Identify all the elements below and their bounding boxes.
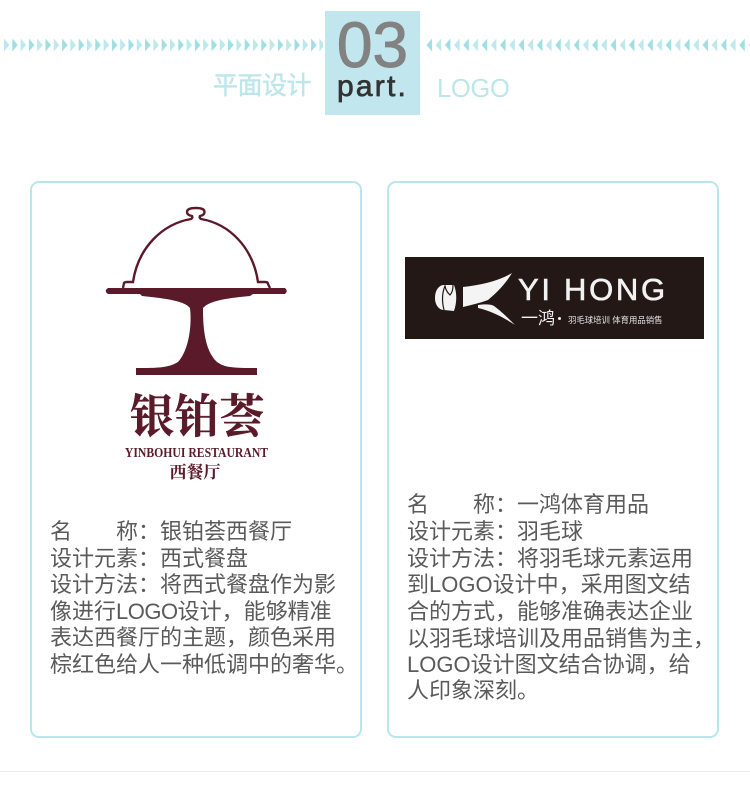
text block: Yi Hong description: 名 称：一鸿体育用品	[407, 492, 649, 517]
number badge	[325, 11, 420, 115]
text block: Yi Hong description: 合的方式，能够准确表达企业	[407, 599, 693, 624]
logo subtitle: 西餐厅	[170, 463, 220, 482]
number 03: 03	[337, 9, 408, 81]
logo english name: YINBOHUI RESTAURANT	[125, 445, 268, 460]
text block: restaurant description: 名 称：银铂荟西餐厅	[50, 519, 292, 544]
logo tagline: 羽毛球培训 体育用品销售	[568, 315, 662, 325]
logo chinese name: 一鸿	[521, 309, 555, 328]
text block: restaurant description: 像进行LOGO设计，能够精准	[50, 599, 332, 624]
text block: Yi Hong description: 设计方法：将羽毛球元素运用	[407, 546, 693, 571]
icon: plate and stand	[106, 288, 287, 375]
logo: restaurant cloche	[106, 206, 287, 375]
text block: Yi Hong description: LOGO设计图文结合协调，给	[407, 652, 691, 677]
text block: restaurant description: 表达西餐厅的主题，颜色采用	[50, 625, 336, 650]
left arrow row	[4, 38, 323, 52]
text block: restaurant description	[50, 519, 358, 677]
logo name: 银铂荟	[130, 392, 265, 443]
subtitle right: LOGO	[437, 75, 510, 103]
panel: Yi Hong logo	[387, 181, 719, 738]
text block: Yi Hong description	[407, 492, 715, 703]
text block: Yi Hong description: 人印象深刻。	[407, 678, 539, 703]
text block: restaurant description: 棕红色给人一种低调中的奢华。	[50, 652, 358, 677]
subtitle left: 平面设计	[213, 72, 311, 100]
text block: restaurant description: 设计元素：西式餐盘	[50, 546, 248, 571]
text block: Yi Hong description: 以羽毛球培训及用品销售为主，	[407, 626, 715, 651]
text block: Yi Hong description: 到LOGO设计中，采用图文结	[407, 572, 691, 597]
logo: Yi Hong	[405, 257, 704, 339]
icon: shuttlecock	[435, 273, 515, 325]
header banner	[4, 9, 750, 115]
part label: part.	[337, 70, 408, 103]
panel: restaurant logo	[30, 181, 362, 738]
icon: cloche dome	[123, 208, 270, 288]
logo wordmark: YI HONG	[518, 272, 668, 307]
logo dot	[558, 317, 561, 320]
text block: Yi Hong description: 设计元素：羽毛球	[407, 519, 583, 544]
right arrow row	[426, 38, 750, 52]
text block: restaurant description: 设计方法：将西式餐盘作为影	[50, 572, 336, 597]
